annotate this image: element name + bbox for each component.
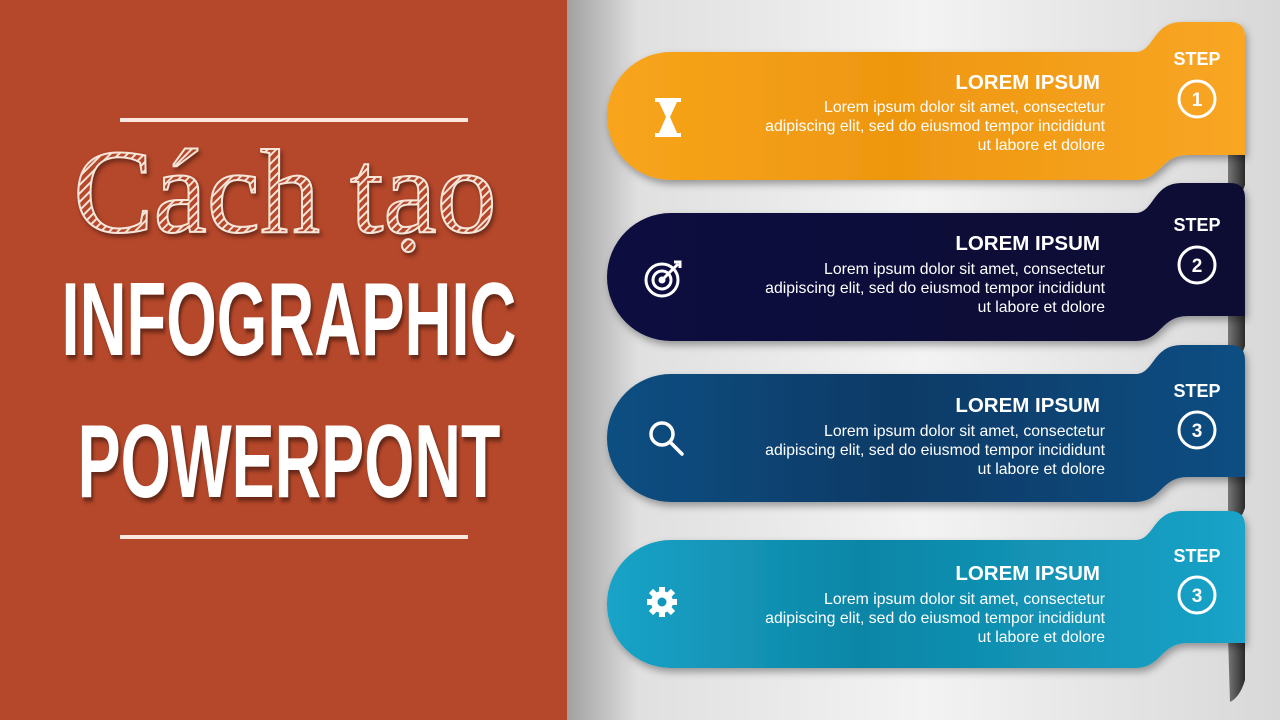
step 1 banner: LOREM IPSUM xyxy=(955,71,1100,94)
step 2 banner xyxy=(607,183,1245,366)
step 4 banner xyxy=(607,511,1245,702)
step 1 banner: 1 xyxy=(1192,90,1203,111)
icon: gear xyxy=(647,587,677,617)
title line 2: INFOGRAPHIC xyxy=(62,261,516,378)
step 1 banner xyxy=(607,22,1245,205)
step 2 banner: 2 xyxy=(1192,256,1202,277)
step 4 banner: adipiscing elit, sed do eiusmod tempor incididunt xyxy=(765,610,1106,627)
step 3 banner: Lorem ipsum dolor sit amet, consectetur xyxy=(824,423,1105,440)
step 2 banner: LOREM IPSUM xyxy=(955,232,1100,255)
step 3 banner: 3 xyxy=(1192,421,1202,442)
step 4 banner: LOREM IPSUM xyxy=(955,562,1100,585)
step 4 banner: STEP xyxy=(1173,546,1221,566)
icon: magnifier xyxy=(651,423,682,454)
step 1 banner: adipiscing elit, sed do eiusmod tempor incididunt xyxy=(765,118,1106,135)
step 1 banner: ut labore et dolore xyxy=(978,137,1105,154)
step 4 banner: ut labore et dolore xyxy=(978,629,1105,646)
icon: hourglass xyxy=(655,98,681,137)
step 2 banner: adipiscing elit, sed do eiusmod tempor incididunt xyxy=(765,280,1106,297)
left panel xyxy=(0,0,567,720)
step 4 banner: 3 xyxy=(1192,586,1202,607)
step 3 banner: ut labore et dolore xyxy=(978,461,1105,478)
step 3 banner xyxy=(607,345,1245,528)
step 2 banner: ut labore et dolore xyxy=(978,299,1105,316)
title line 3: POWERPONT xyxy=(78,404,500,520)
icon: target xyxy=(646,262,680,296)
step 2 banner: STEP xyxy=(1173,215,1221,235)
background right xyxy=(567,0,1280,720)
step 1 banner: STEP xyxy=(1173,49,1221,69)
step 3 banner: LOREM IPSUM xyxy=(955,394,1100,417)
step 4 banner: Lorem ipsum dolor sit amet, consectetur xyxy=(824,591,1105,608)
step 3 banner: STEP xyxy=(1173,381,1221,401)
title line 1: Cách tạo xyxy=(73,125,497,258)
step 3 banner: adipiscing elit, sed do eiusmod tempor incididunt xyxy=(765,442,1106,459)
step 1 banner: Lorem ipsum dolor sit amet, consectetur xyxy=(824,99,1105,116)
step 2 banner: Lorem ipsum dolor sit amet, consectetur xyxy=(824,261,1105,278)
